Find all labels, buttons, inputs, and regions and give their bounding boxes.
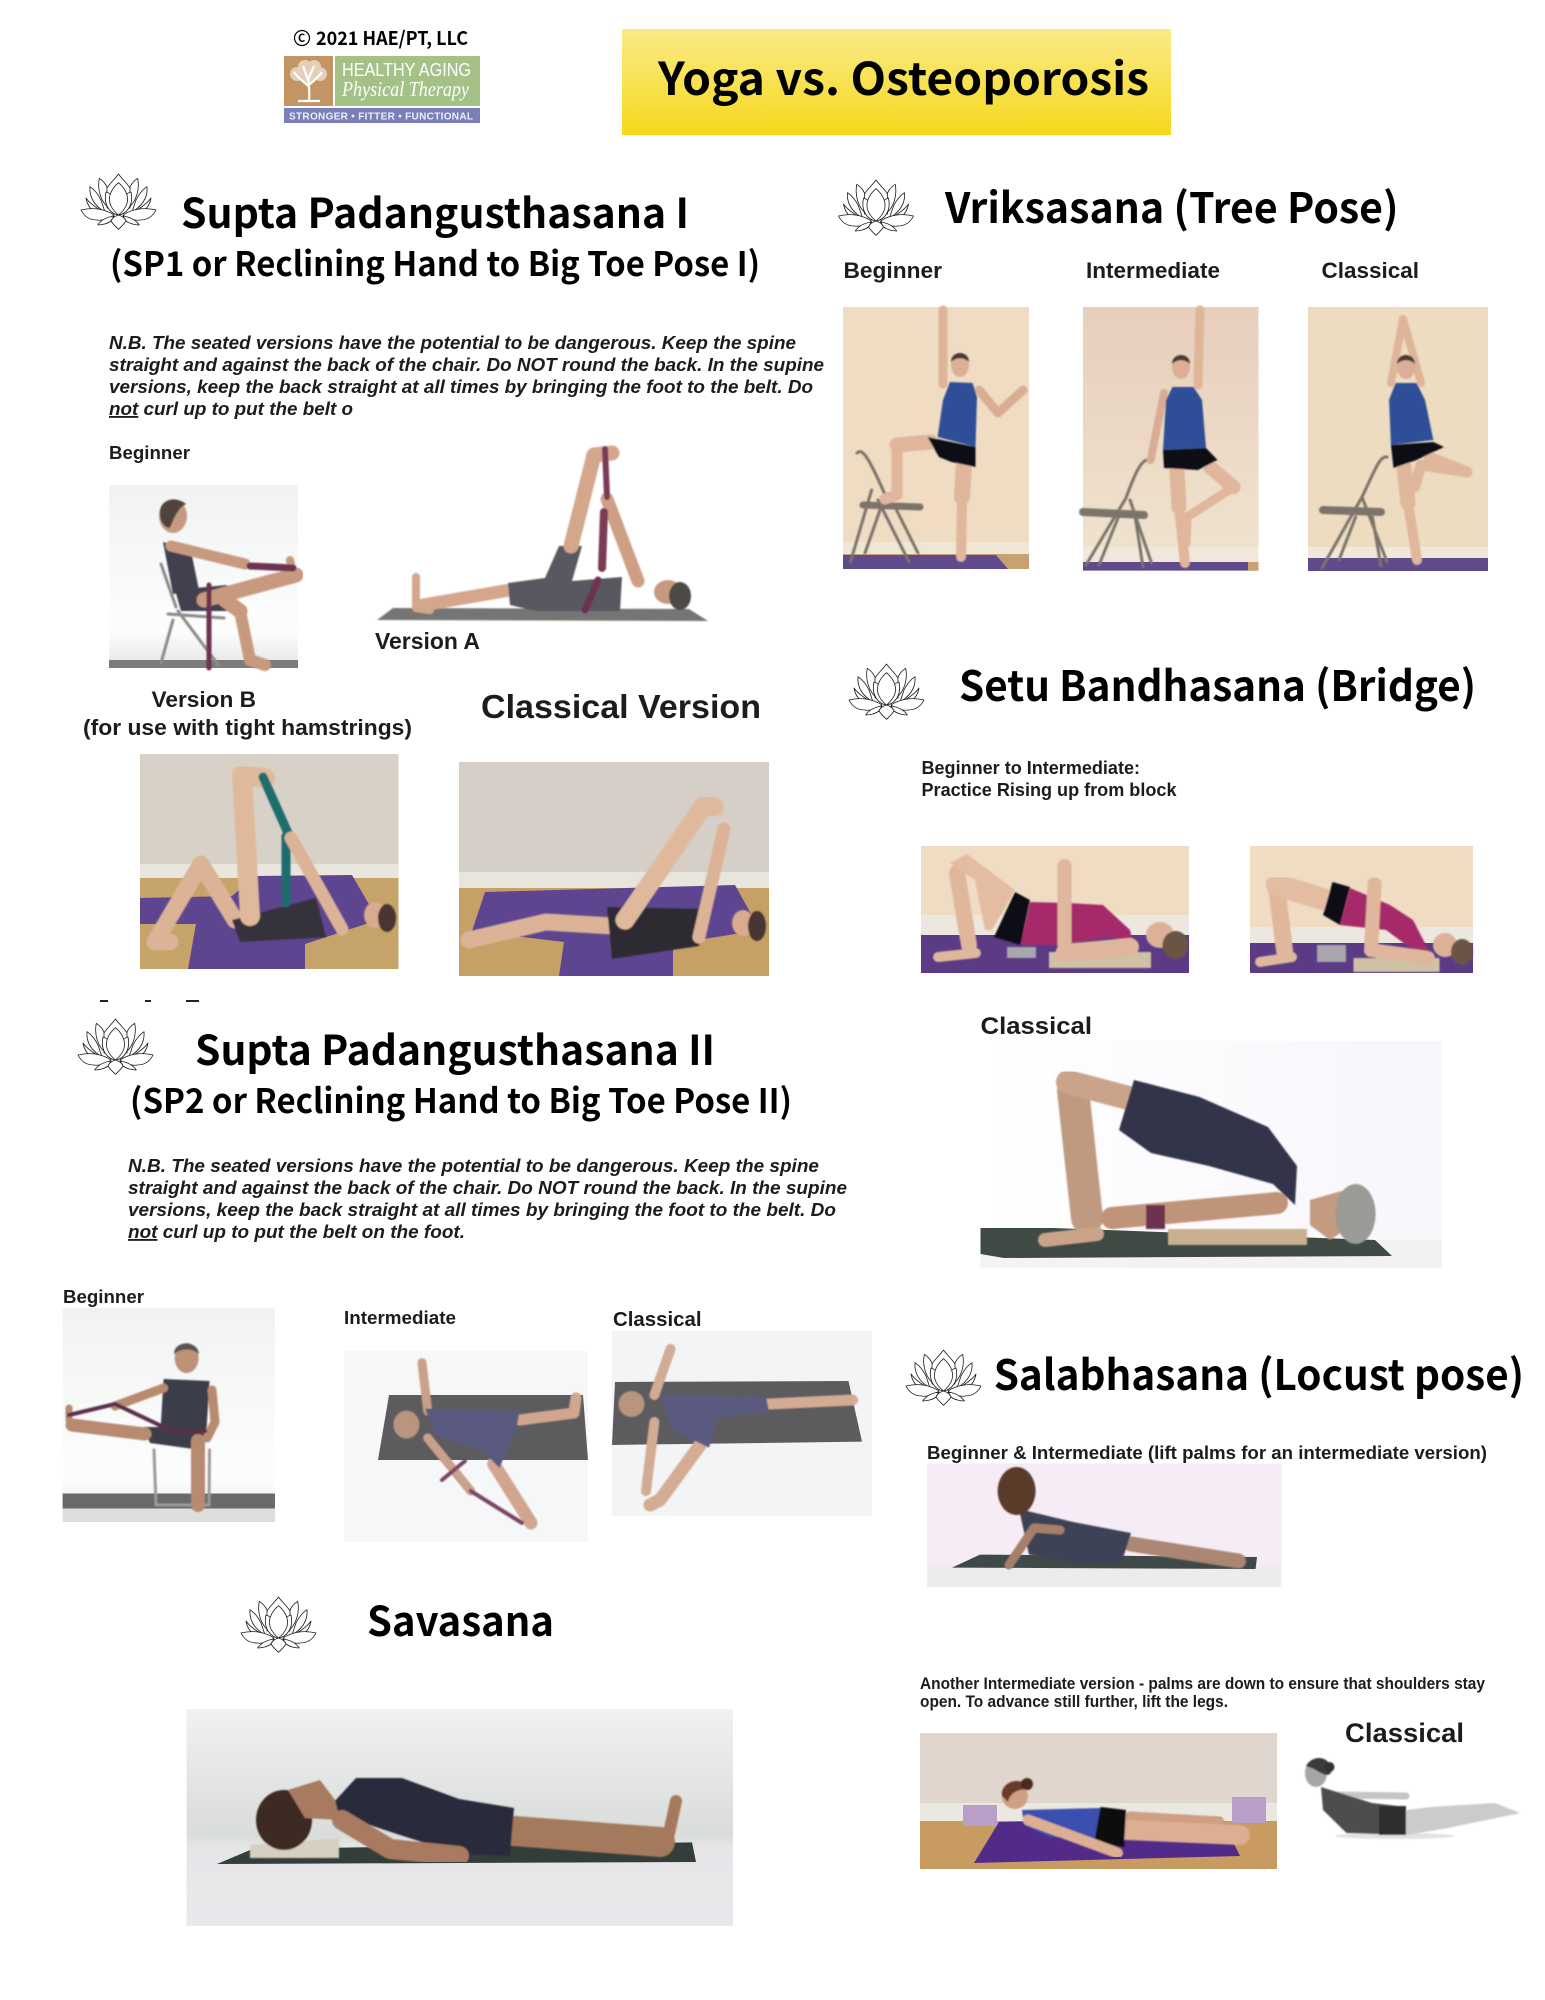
subheading: (SP2 or Reclining Hand to Big Toe Pose II) — [130, 1074, 792, 1123]
heading: Supta Padangusthasana II — [195, 1017, 715, 1077]
safety note: versions, keep the back straight at all times by bringing the foot to the belt. Do — [109, 376, 813, 397]
header — [284, 24, 1171, 135]
safety note: not curl up to put the belt o — [109, 398, 353, 419]
photo: classical version with hand holding toe — [459, 762, 769, 976]
photo: locust on elbows — [927, 1464, 1282, 1587]
logo: Healthy Aging Physical Therapy: Physical Therapy — [341, 77, 470, 101]
photo: bridge from block, low — [921, 846, 1189, 973]
panel: Supta Padangusthasana I — [81, 174, 824, 1002]
panel: Supta Padangusthasana II — [63, 1017, 872, 1542]
safety note: straight and against the back of the chair. Do NOT round the back. In the supine — [128, 1177, 847, 1198]
icon: lotus — [838, 180, 914, 235]
label: Classical: Classical — [1345, 1718, 1464, 1748]
subheading: (SP1 or Reclining Hand to Big Toe Pose I) — [110, 237, 760, 286]
label: another intermediate version: Another Intermediate version - palms are down to ensure that shoulders stay — [920, 1675, 1486, 1693]
photo: classical bridge — [980, 1041, 1442, 1268]
photo: tree pose classical — [1308, 307, 1488, 571]
label: Version B: (for use with tight hamstrings) — [83, 715, 412, 740]
icon: lotus — [849, 664, 924, 719]
photo: bridge from block, high — [1250, 846, 1473, 973]
photo: corpse pose — [186, 1709, 733, 1926]
level labels: Intermediate — [1086, 258, 1220, 283]
logo: Healthy Aging Physical Therapy: STRONGER • FITTER • FUNCTIONAL — [289, 112, 473, 122]
photo: Version A supine with strap — [377, 449, 708, 621]
label: Classical: Classical — [613, 1309, 702, 1331]
copyright line: C — [298, 30, 305, 46]
logo: Healthy Aging Physical Therapy — [284, 56, 480, 123]
photo: seated leg to side with strap — [63, 1308, 275, 1522]
clipped caption fragment — [100, 1000, 199, 1002]
safety note: N.B. The seated versions have the potential to be dangerous. Keep the spine — [109, 332, 796, 353]
photo: tree pose beginner — [843, 307, 1029, 569]
photo: Version B with teal strap — [140, 754, 398, 969]
label: Version B — [83, 687, 412, 740]
label: beginner and intermediate: Beginner & Intermediate (lift palms for an intermediate version) — [927, 1442, 1487, 1463]
photo: tree pose intermediate — [1083, 307, 1258, 571]
icon: lotus — [78, 1019, 153, 1074]
label: Intermediate: Intermediate — [344, 1307, 456, 1328]
safety note: versions, keep the back straight at all times by bringing the foot to the belt. Do — [128, 1199, 836, 1220]
label: Version A: Version A — [375, 628, 480, 654]
title banner: Yoga vs. Osteoporosis — [657, 43, 1149, 108]
safety note: straight and against the back of the chair. Do NOT round the back. In the supine — [109, 354, 824, 375]
photo: locust palms down — [920, 1733, 1277, 1869]
photo: classical leg to side — [612, 1331, 872, 1516]
panel: Salabhasana — [906, 1342, 1524, 1869]
icon: lotus — [241, 1597, 316, 1652]
label: beginner to intermediate: Practice Rising up from block — [922, 779, 1177, 800]
safety note — [109, 332, 824, 419]
title banner — [622, 29, 1171, 135]
panel: Savasana — [186, 1588, 733, 1926]
label: Beginner: Beginner — [109, 442, 190, 463]
level labels: Beginner — [844, 258, 942, 283]
logo: Healthy Aging Physical Therapy: HEALTHY AGING — [342, 60, 471, 80]
photo: intermediate leg to side on mat — [344, 1351, 588, 1542]
safety note: N.B. The seated versions have the potential to be dangerous. Keep the spine — [128, 1155, 819, 1176]
label: beginner to intermediate: Beginner to Intermediate: — [922, 757, 1140, 778]
heading: Salabhasana (Locust pose) — [994, 1342, 1524, 1403]
level labels: Classical — [1322, 258, 1419, 283]
heading: Vriksasana (Tree Pose) — [944, 175, 1398, 236]
safety note: not curl up to put the belt on the foot. — [128, 1221, 465, 1242]
label: Classical Version: Classical Version — [481, 688, 761, 725]
label: beginner to intermediate — [922, 757, 1177, 800]
icon: lotus — [906, 1350, 981, 1405]
label: Beginner: Beginner — [63, 1286, 144, 1307]
level labels — [844, 258, 1419, 283]
photo: seated hand to toe with strap — [109, 485, 298, 668]
panel: Setu Bandhasana — [849, 653, 1476, 1268]
heading: Savasana — [367, 1588, 554, 1648]
photo: classical locust in black and white — [1305, 1758, 1520, 1839]
label: another intermediate version: open. To advance still further, lift the legs. — [920, 1693, 1228, 1711]
label: Version B: Version B — [152, 687, 256, 712]
heading: Setu Bandhasana (Bridge) — [959, 653, 1476, 714]
icon: lotus — [81, 174, 156, 229]
copyright line: 2021 HAE/PT, LLC — [316, 24, 468, 51]
heading: Supta Padangusthasana I — [181, 180, 689, 240]
panel: Vriksasana — [838, 175, 1488, 571]
label: another intermediate version — [920, 1675, 1486, 1711]
label: Classical: Classical — [980, 1013, 1092, 1040]
safety note — [128, 1155, 847, 1242]
